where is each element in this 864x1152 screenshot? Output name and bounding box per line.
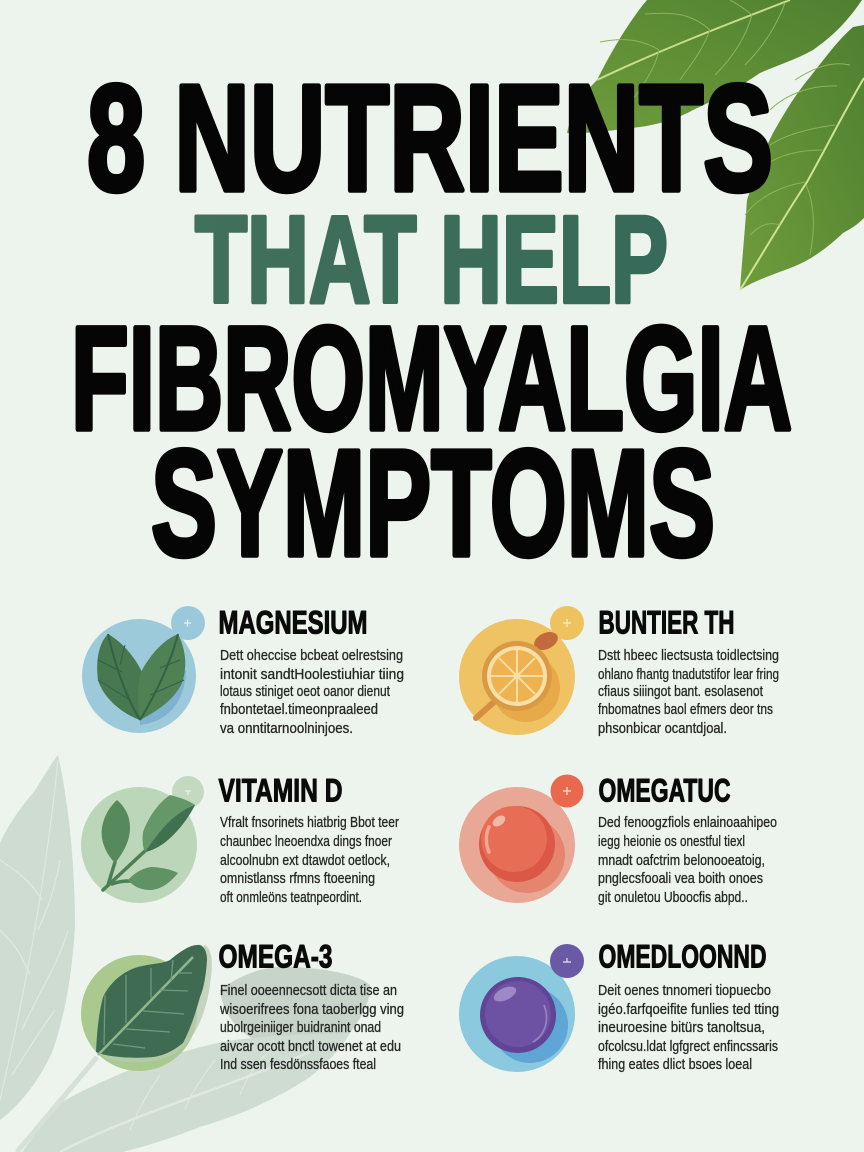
text block: magnesium description: intonit sandtHoolestiuhiar tiing (220, 667, 404, 683)
text block: omedloonnd description: igéo.farfqoeifite funlies ted tting (598, 1002, 779, 1018)
heading: Buntier TH: BUNTIER TH (598, 604, 734, 640)
text block: citrus description: ohlano fhantg tnadutstifor lear fring (598, 667, 779, 683)
icon: orange slice on yellow circle (459, 606, 584, 735)
text block: omegatuc description: Ded fenoogzfiols enlainoaahipeo (598, 815, 777, 831)
text block: magnesium description: lotaus stiniget oeot oanor dienut (220, 684, 390, 700)
icon: red capsule on coral circle (459, 774, 584, 903)
text block: vitamin D description: alcoolnubn ext dtawdot oetlock, (220, 853, 390, 869)
text block: vitamin D description: oft onmleöns teatnpeordint. (220, 890, 362, 906)
text block: omega-3 description: wisoerifrees fona taoberlgg ving (219, 1002, 404, 1018)
panel: citrus nutrient (459, 604, 779, 737)
decorative leaf: lower left pale (0, 755, 75, 1120)
panel: omedloonnd (459, 938, 779, 1073)
title line: That Help: THAT HELP (195, 192, 668, 329)
text block: citrus description: cfiaus siiingot bant. esolasenot (598, 684, 763, 700)
text block: vitamin D description: omnistlanss rfmns ftoeening (220, 871, 375, 887)
text block: omega-3 description: aivcar ocott bnctl towenet at edu (220, 1039, 401, 1055)
icon: sprig on green circle (81, 776, 204, 903)
text block: omegatuc description: iegg heionie os onestful tiexl (598, 834, 745, 850)
text block: citrus description: Dstt hbeec liectsusta toidlectsing (598, 648, 779, 664)
heading: Omedloonnd: OMEDLOONND (598, 938, 766, 974)
text block: citrus description: phsonbicar ocantdjoal. (598, 721, 727, 737)
text block: omega-3 description: Ind ssen fesdönssfaoes fteal (220, 1057, 376, 1073)
panel: magnesium (82, 604, 404, 737)
text block: omedloonnd description: Deit oenes tnnomeri tiopuecbo (598, 983, 771, 999)
panel: omegatuc (459, 772, 777, 906)
text block: omedloonnd description: ofcolcsu.ldat lgfgrect enfincssaris (598, 1039, 778, 1055)
text block: vitamin D description: Vfralt fnsorinets hiatbrig Bbot teer (220, 815, 399, 831)
text block: magnesium description: va onntitarnoolninjoes. (220, 721, 353, 737)
text block: omega-3 description (219, 983, 404, 1073)
title (71, 53, 792, 587)
heading: Vitamin D: VITAMIN D (218, 772, 342, 808)
text block: omegatuc description (598, 815, 777, 906)
icon: purple capsule on blue circle (459, 944, 584, 1072)
text block: vitamin D description (220, 815, 399, 906)
text block: omedloonnd description: ineuroesine bitürs tanoltsua, (598, 1020, 765, 1036)
text block: magnesium description: Dett oheccise bcbeat oelrestsing (220, 648, 403, 664)
decorative leaf: bottom pale (17, 967, 370, 1152)
text block: omedloonnd description: fhing eates dlict bsoes loeal (598, 1057, 752, 1073)
text block: magnesium description: fnbontetael.timeonpraaleed (220, 702, 378, 718)
heading: Omegatuc: OMEGATUC (598, 772, 730, 808)
heading: Omega-3: OMEGA-3 (218, 938, 332, 974)
icon: green leaves on blue circle (82, 606, 205, 733)
decorative leaf: top (567, 0, 862, 133)
panel: omega-3 (81, 938, 404, 1073)
text block: omegatuc description: git onuletou Uboocfis abpd.. (598, 890, 748, 906)
decorative leaf: right (740, 25, 864, 290)
text block: omegatuc description: mnadt oafctrim belonooeatoig, (598, 853, 765, 869)
panel: vitamin D (81, 772, 399, 906)
heading: Magnesium: MAGNESIUM (218, 604, 368, 640)
text block: citrus description (598, 648, 779, 737)
text block: magnesium description (220, 648, 404, 737)
icon: dark leaf on green circle (81, 945, 212, 1071)
text block: citrus description: fnbomatnes baol efmers deor tns (598, 702, 773, 718)
text block: vitamin D description: chaunbec lneoendxa dings fnoer (220, 834, 392, 850)
text block: omega-3 description: ubolrgeiniiger buidranint onad (220, 1020, 381, 1036)
text block: omega-3 description: Finel ooeennecsott dicta tise an (220, 983, 397, 999)
text block: omedloonnd description (598, 983, 779, 1073)
text block: omegatuc description: pnglecsfooali vea boith onoes (598, 871, 763, 887)
